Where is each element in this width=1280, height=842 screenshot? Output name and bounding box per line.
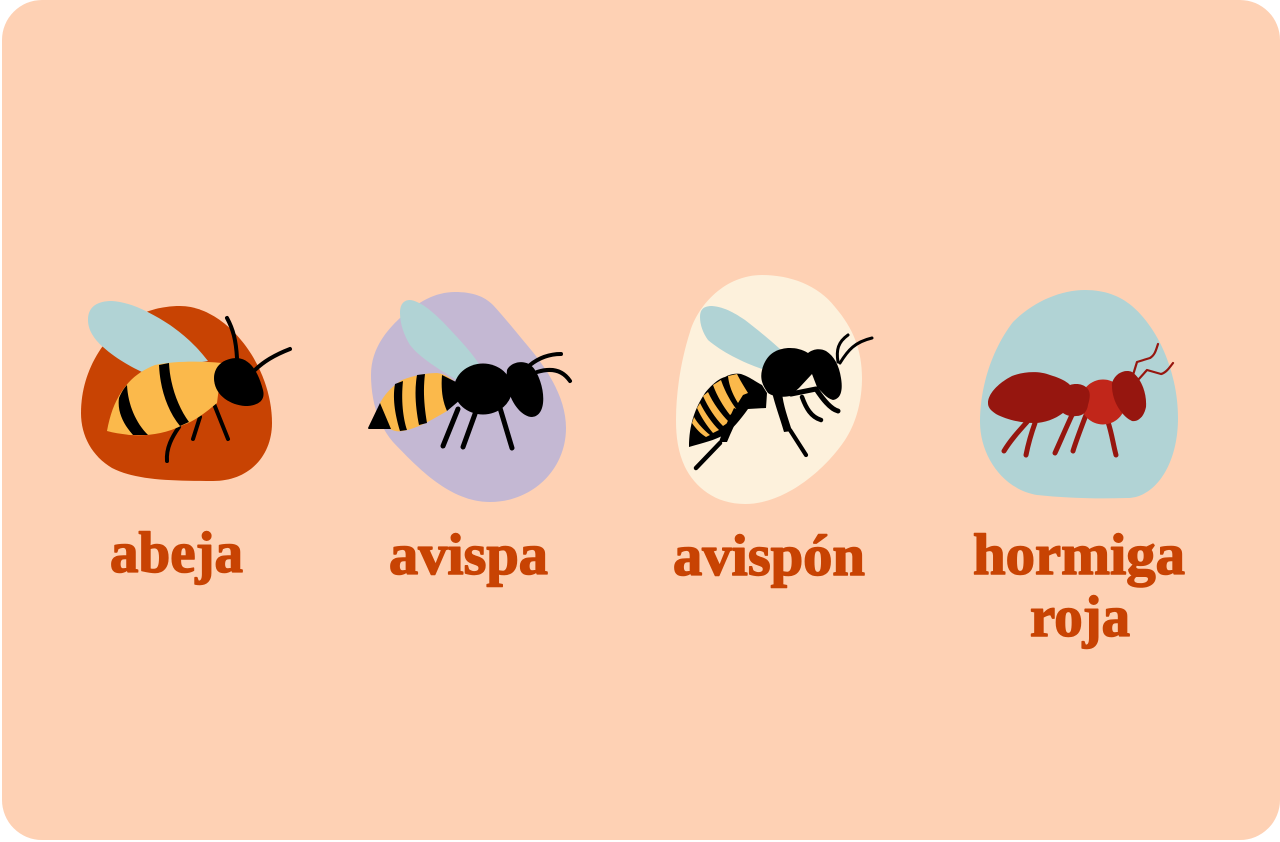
legs and antennae (443, 354, 570, 448)
thorax (1080, 380, 1126, 424)
abdomen (380, 373, 455, 431)
wing (400, 300, 479, 380)
abdomen (988, 372, 1090, 423)
icon: avispón (689, 306, 872, 468)
abdomen stripes (692, 374, 748, 437)
label line: hormiga: hormiga (973, 522, 1185, 587)
stripes (119, 363, 189, 435)
blob: avispón (676, 275, 862, 504)
abdomen (689, 374, 767, 447)
body (107, 362, 222, 435)
legs (719, 392, 792, 442)
icon: avispa (368, 300, 570, 448)
blob: hormiga (980, 290, 1178, 498)
head (507, 362, 543, 417)
label: avispa: avispa (389, 522, 548, 587)
thorax (454, 364, 512, 414)
thorax and head (761, 348, 842, 400)
label: avispón: avispón (673, 523, 865, 588)
label line: roja: roja (1030, 584, 1130, 649)
panel: avispón (673, 275, 872, 588)
label: abeja: abeja (110, 520, 243, 585)
head (1112, 371, 1146, 421)
leg ends (696, 389, 838, 468)
blob: abeja (81, 306, 272, 481)
legs and antennae (167, 318, 290, 461)
panel: abeja (81, 301, 290, 585)
panel: hormiga roja (973, 290, 1185, 649)
legs (1004, 415, 1116, 455)
stripes and stinger (368, 374, 460, 431)
wing (700, 306, 780, 369)
icon: abeja (88, 301, 290, 461)
head (214, 358, 264, 406)
panel: avispa (368, 292, 570, 587)
antennae (1133, 344, 1173, 380)
label: hormiga roja (973, 522, 1185, 649)
icon: hormiga (988, 344, 1173, 455)
wing (88, 301, 208, 372)
blob: avispa (371, 292, 566, 502)
antennae (837, 335, 872, 363)
